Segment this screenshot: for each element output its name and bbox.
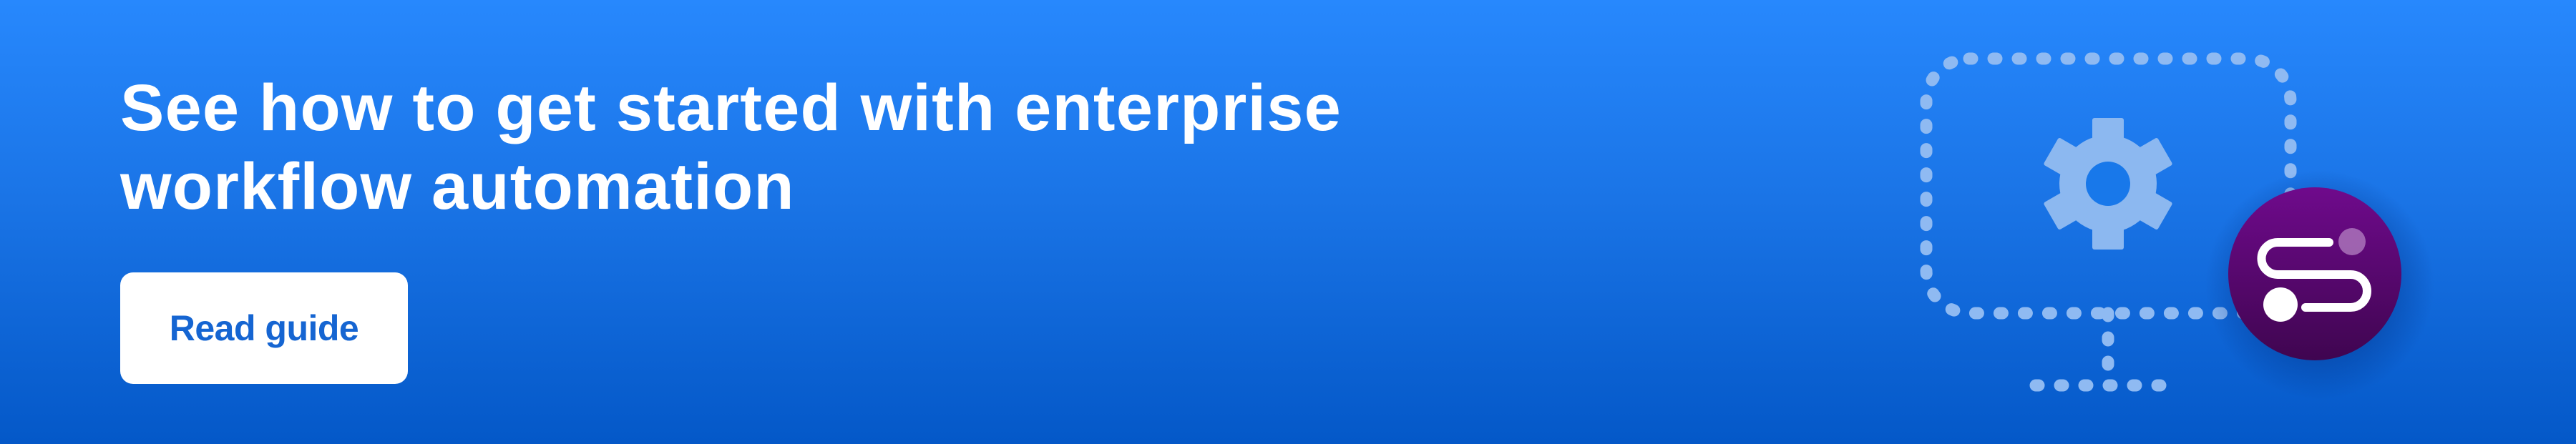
button: read guide: [120, 272, 408, 384]
title: workflow automation: [120, 150, 795, 223]
icon: gear: [2043, 118, 2173, 250]
title: See how to get started with enterprise: [120, 71, 1342, 144]
title: [120, 71, 1342, 223]
icon: dotted monitor: [1926, 59, 2290, 385]
button: read guide: Read guide: [170, 308, 358, 348]
icon: logo badge: [2205, 170, 2434, 399]
